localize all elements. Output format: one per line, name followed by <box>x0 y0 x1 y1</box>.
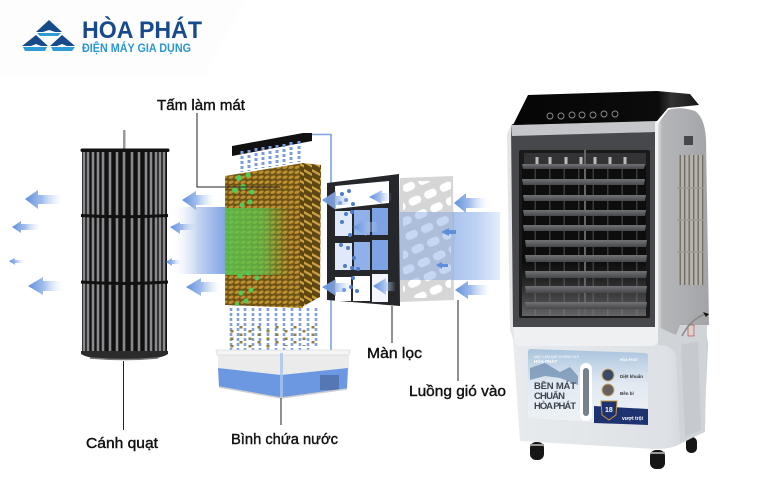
product sticker: Bền bỉ <box>620 391 635 396</box>
product sticker: 18 <box>605 407 613 414</box>
product sticker: HÒA PHÁT <box>534 400 576 412</box>
leader: tấm làm mát <box>197 113 280 187</box>
logo tagline: ĐIỆN MÁY GIA DỤNG <box>82 42 191 55</box>
louvers <box>522 164 647 309</box>
sticker feature text: Diệt khuẩn <box>620 373 643 379</box>
label: tấm làm mát: Tấm làm mát <box>157 98 245 114</box>
airflow band through the filters <box>400 212 500 280</box>
cooling pad: tấm làm mát <box>225 163 321 308</box>
air filter mesh <box>400 176 454 302</box>
leader: bình chứa nước <box>280 398 282 425</box>
product sticker: vượt trội <box>622 416 644 422</box>
cooler front panel <box>509 122 656 327</box>
cooler side panel <box>657 108 709 335</box>
label: màn lọc: Màn lọc <box>367 346 422 362</box>
filter frame: màn lọc <box>327 174 400 306</box>
cooler lower body <box>512 325 708 449</box>
warranty shield <box>601 401 617 420</box>
falling water under the pad <box>231 308 316 352</box>
sticker headline: BỀN MÁT <box>534 381 576 392</box>
water level window <box>580 363 592 421</box>
water distributor bar <box>232 133 312 172</box>
logo background <box>0 0 245 75</box>
arrows: air entering the fan <box>166 191 220 296</box>
side handle and vent <box>684 136 693 145</box>
green cooled air zone <box>225 208 290 275</box>
top control panel <box>513 91 699 125</box>
icon: logo triangles <box>22 20 75 51</box>
control buttons <box>547 111 618 119</box>
arrows: air through filter <box>322 190 456 296</box>
cooler wheels <box>530 437 697 469</box>
arrows: air leaving the fan <box>9 190 62 295</box>
lower side panel <box>658 325 707 443</box>
water tank: bình chứa nước <box>216 350 350 398</box>
label: luồng gió vào: Luồng gió vào <box>409 384 506 400</box>
logo: Hòa Phát <box>22 16 202 55</box>
cooler grille <box>519 150 650 318</box>
airflow band between fan and cooling pad <box>170 207 226 274</box>
label: cánh quạt: Cánh quạt <box>86 436 158 452</box>
arrows: incoming air <box>454 193 490 299</box>
fan: cánh quạt <box>80 130 170 360</box>
sticker feature icons <box>602 369 614 381</box>
air cooler product <box>507 91 709 469</box>
product sticker: HÒA PHÁT <box>620 357 639 362</box>
logo wordmark: HÒA PHÁT <box>82 16 202 44</box>
sticker brand text: MÁY LÀM MÁT KHÔNG KHÍ <box>534 354 579 359</box>
blue droplets on filter <box>338 189 360 293</box>
sticker navy band <box>594 406 648 425</box>
product sticker: HÒA PHÁT <box>534 357 558 364</box>
sticker mountains <box>530 363 578 385</box>
water pipe <box>312 134 331 372</box>
green droplets <box>232 172 260 306</box>
label: bình chứa nước: Bình chứa nước <box>231 432 338 448</box>
side warning label <box>688 325 694 336</box>
leader: cánh quạt <box>122 361 124 430</box>
leader: luồng gió vào <box>457 300 459 381</box>
product sticker: CHUẨN <box>534 390 565 402</box>
product sticker <box>528 349 648 425</box>
leader: màn lọc <box>391 306 393 343</box>
